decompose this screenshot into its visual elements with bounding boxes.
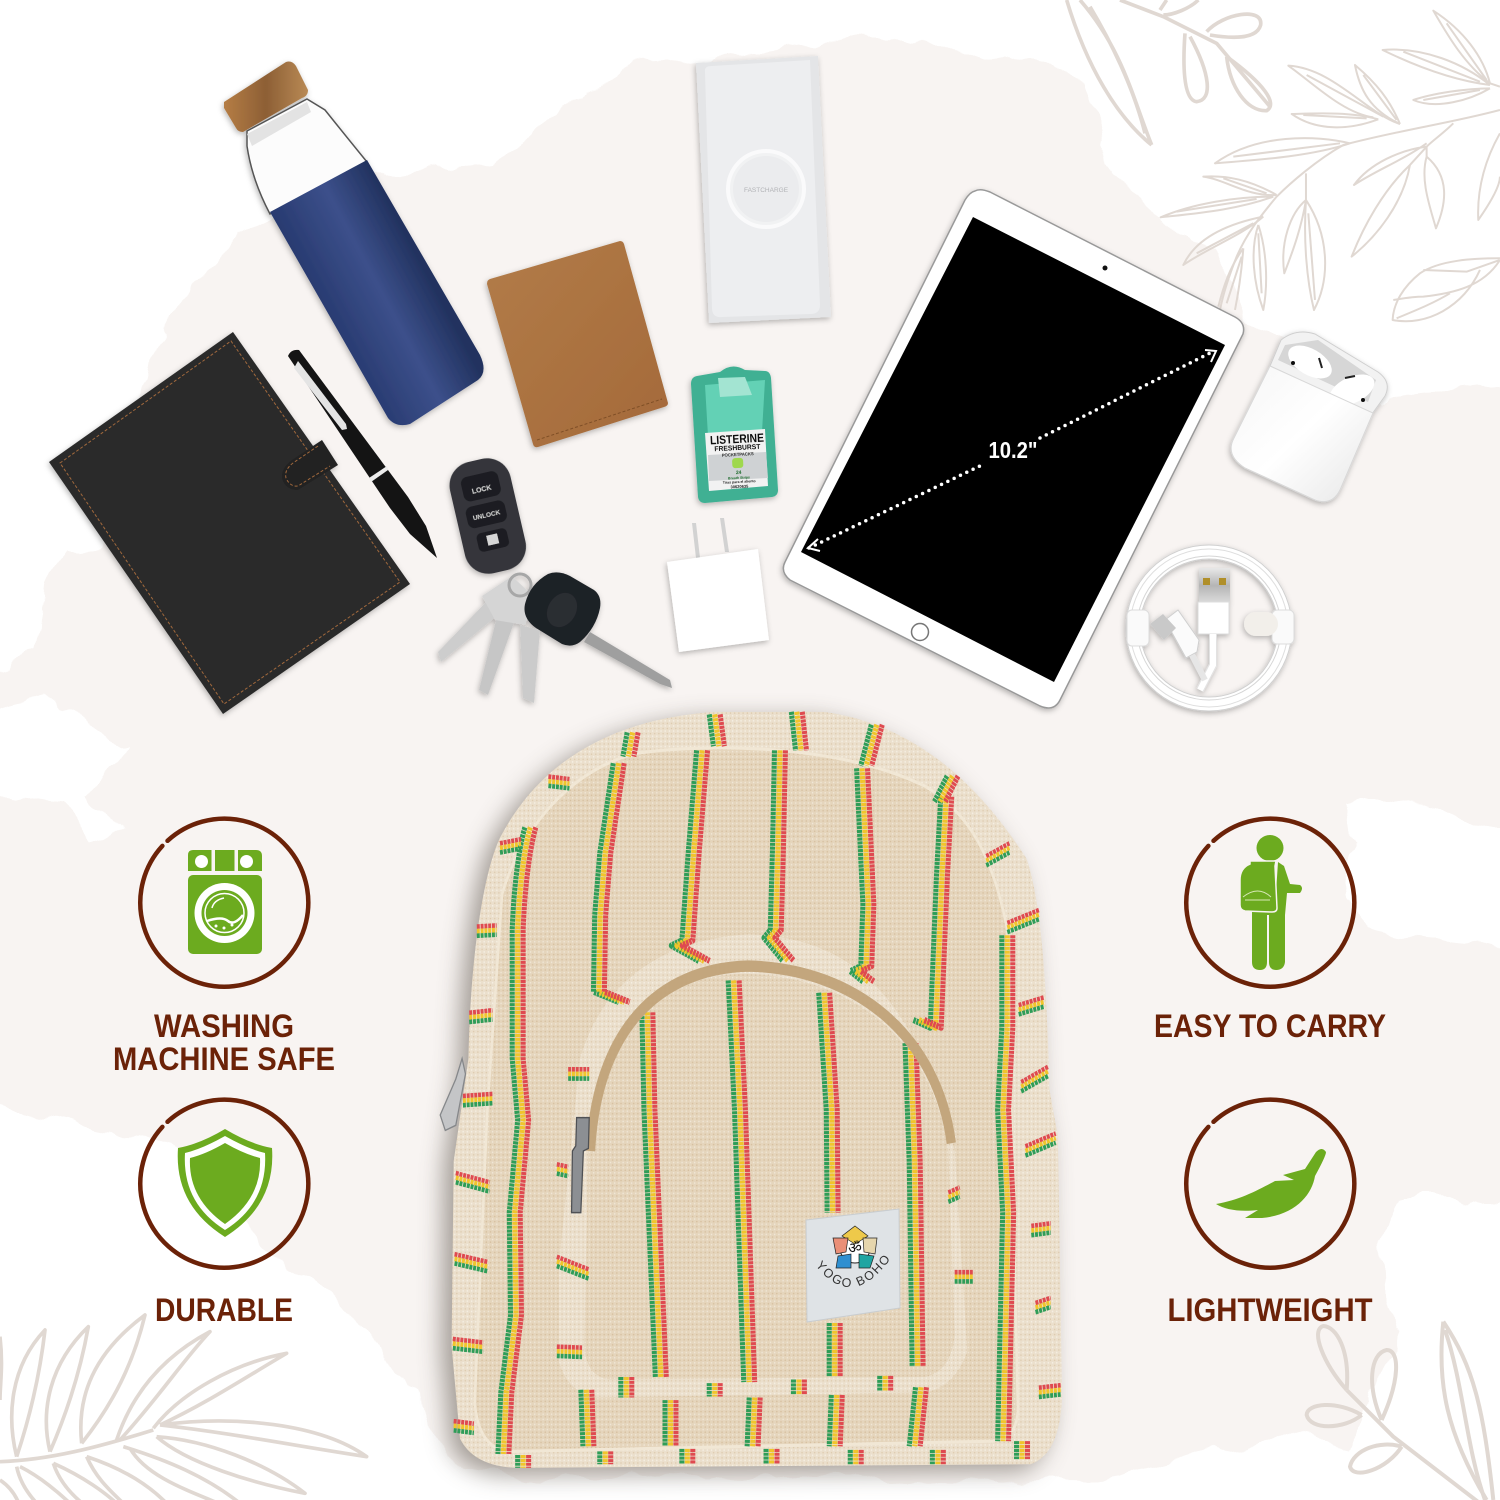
label: MACHINE SAFE [113,1041,335,1077]
ring [1186,819,1354,987]
breath strips label: POCKETPACKS [722,451,754,458]
feature: washing machine safe [113,819,335,1077]
breath strips label: Tiras para el aliento [723,479,756,485]
pocket zipper pull [572,1118,589,1213]
pocket gusset [559,934,967,1397]
pocket zipper tape [591,966,951,1151]
bottle wood cap [224,62,308,132]
tablet screen [801,217,1225,682]
ring [140,1100,308,1268]
water bottle [224,62,484,425]
breath strips label: 30620635 [730,483,749,489]
notebook strap [282,440,338,490]
icon: washing machine [188,849,262,954]
ring [1186,1100,1354,1268]
charging cable coil [1127,549,1294,707]
screen size label: 10.2" [988,437,1038,463]
breath strips label: Breath Strips [728,475,750,481]
front pocket [584,974,955,1380]
leaf decoration: bottom right [1307,1322,1493,1500]
icon: shield [178,1129,272,1237]
breath strips pack [691,366,778,503]
woven stripes side [453,777,1061,1433]
breath strips label: FRESHBURST [714,444,761,453]
tablet home button [912,624,928,640]
breath strips label [705,429,768,491]
brand patch [806,1208,900,1322]
feature: lightweight [1168,1100,1373,1328]
icon: leaf [1216,1149,1326,1218]
woven stripes vertical [498,712,1028,1468]
bottle glass [247,99,367,214]
tablet [783,190,1244,708]
fob buttons [458,470,514,554]
brand name: YOGO BOHO [818,1256,889,1287]
backpack shadow [442,719,1052,1475]
leaf decoration: top right [1067,0,1500,321]
lightning connector [1150,610,1205,680]
backpack [426,703,1068,1491]
key fob remote [445,454,531,579]
car key head [524,572,600,646]
wireless charging ring: FASTCHARGE [744,187,789,194]
fob buttons: UNLOCK [472,509,501,522]
fob buttons: LOCK [471,485,492,496]
breath strips label: LISTERINE [710,431,764,447]
main zipper pull [440,1059,465,1130]
notebook [49,332,410,714]
tablet camera [1102,266,1108,270]
feature: easy to carry [1154,819,1386,1044]
backpack outer shell [452,712,1062,1468]
label: WASHING [154,1008,294,1044]
backpack front panel [475,748,1018,1451]
leaf decoration: bottom left [0,1315,367,1500]
power bank [696,56,831,323]
feature: durable [140,1100,308,1328]
wallet [487,241,668,447]
key ring with keys [438,572,672,703]
wall charger [667,518,769,652]
wireless charging ring [728,151,804,227]
earbuds case [1231,332,1387,502]
icon: person with backpack [1240,835,1302,970]
usb connector [1198,568,1230,690]
ring [140,819,308,987]
brand logo: ॐ [848,1239,862,1257]
pen [288,350,437,558]
breath strips label: 24 [736,470,742,476]
screen size arrow [808,350,1216,551]
label: LIGHTWEIGHT [1168,1292,1373,1328]
label: EASY TO CARRY [1154,1008,1386,1044]
label: DURABLE [155,1292,293,1328]
bottle silicone sleeve [270,160,484,425]
